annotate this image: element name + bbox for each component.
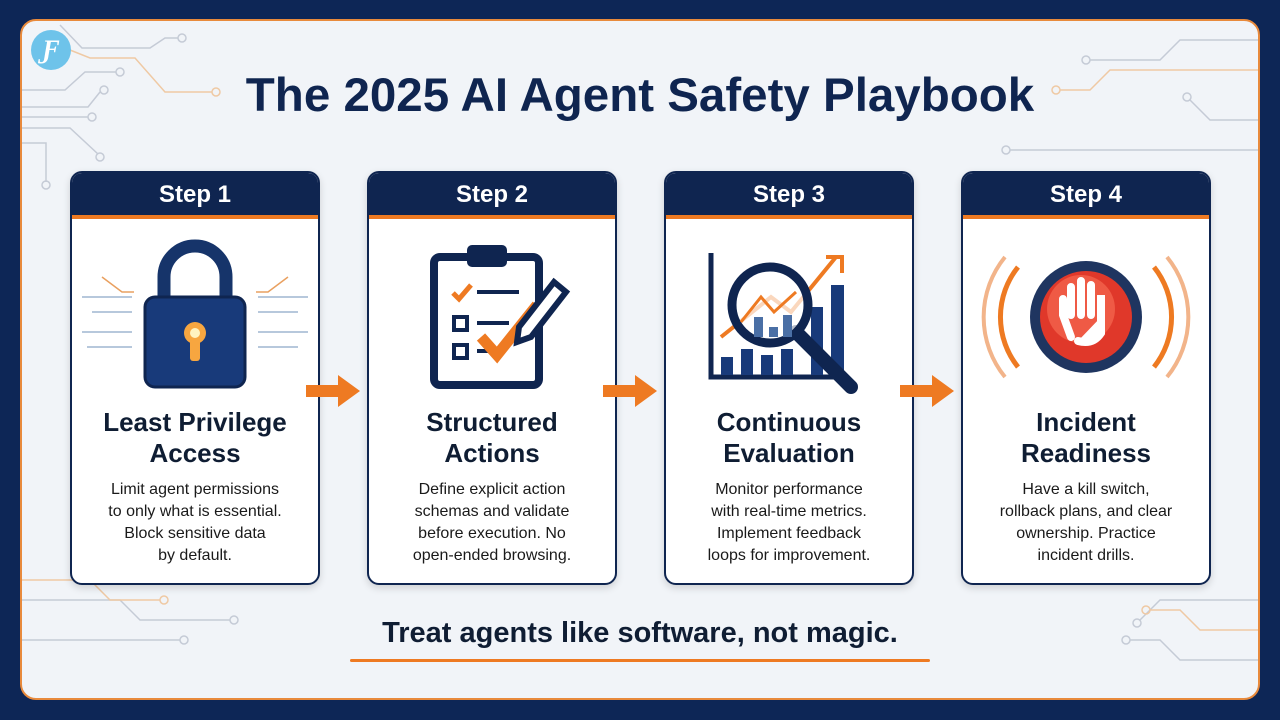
arrow	[603, 375, 657, 407]
text	[708, 481, 870, 564]
text: ownership. Practice	[1016, 525, 1156, 542]
title: incident readiness: Incident	[1036, 407, 1136, 437]
card: step 3: Step 3	[753, 181, 825, 208]
title: least privilege access: Access	[149, 438, 241, 468]
title: least privilege access	[103, 407, 287, 468]
text: Define explicit action	[419, 481, 565, 498]
text	[108, 481, 282, 564]
title: continuous evaluation	[717, 407, 861, 468]
title: structured actions	[426, 407, 558, 468]
text: with real-time metrics.	[711, 503, 867, 520]
title: continuous evaluation: Continuous	[717, 407, 861, 437]
title: continuous evaluation: Evaluation	[723, 438, 855, 468]
title: incident readiness: Readiness	[1021, 438, 1151, 468]
title: incident readiness	[1021, 407, 1151, 468]
text: Have a kill switch,	[1022, 481, 1150, 498]
card: step 1: Step 1	[159, 181, 231, 208]
text: Monitor performance	[715, 481, 863, 498]
title: structured actions: Actions	[444, 438, 540, 468]
card: step 4: Step 4	[1050, 181, 1122, 208]
text: Limit agent permissions	[111, 481, 279, 498]
text: to only what is essential.	[108, 503, 282, 520]
card: step 3	[664, 171, 914, 585]
text: loops for improvement.	[708, 547, 870, 564]
logo: Ƒ	[42, 35, 60, 64]
title: least privilege access: Least Privilege	[103, 407, 287, 437]
arrow	[900, 375, 954, 407]
text: open-ended browsing.	[413, 547, 571, 564]
logo	[31, 30, 71, 70]
icon: padlock	[82, 240, 308, 388]
text: schemas and validate	[415, 503, 569, 520]
card: step 4	[961, 171, 1211, 585]
card: step 2	[367, 171, 617, 585]
icon: clipboard checklist	[430, 245, 570, 389]
arrow	[306, 375, 360, 407]
icon: kill switch button	[982, 256, 1190, 378]
text: before execution. No	[418, 525, 566, 542]
card: step 2: Step 2	[456, 181, 528, 208]
text: Implement feedback	[717, 525, 861, 542]
text: rollback plans, and clear	[1000, 503, 1172, 520]
text: incident drills.	[1038, 547, 1134, 564]
title: structured actions: Structured	[426, 407, 558, 437]
text	[413, 481, 571, 564]
title: The 2025 AI Agent Safety Playbook	[246, 69, 1034, 122]
icon: chart with magnifier	[708, 253, 858, 394]
tagline underline	[350, 659, 930, 662]
text: by default.	[158, 547, 232, 564]
text: Block sensitive data	[124, 525, 266, 542]
card: step 1	[70, 171, 320, 585]
text	[1000, 481, 1172, 564]
tagline: Treat agents like software, not magic.	[382, 617, 898, 649]
